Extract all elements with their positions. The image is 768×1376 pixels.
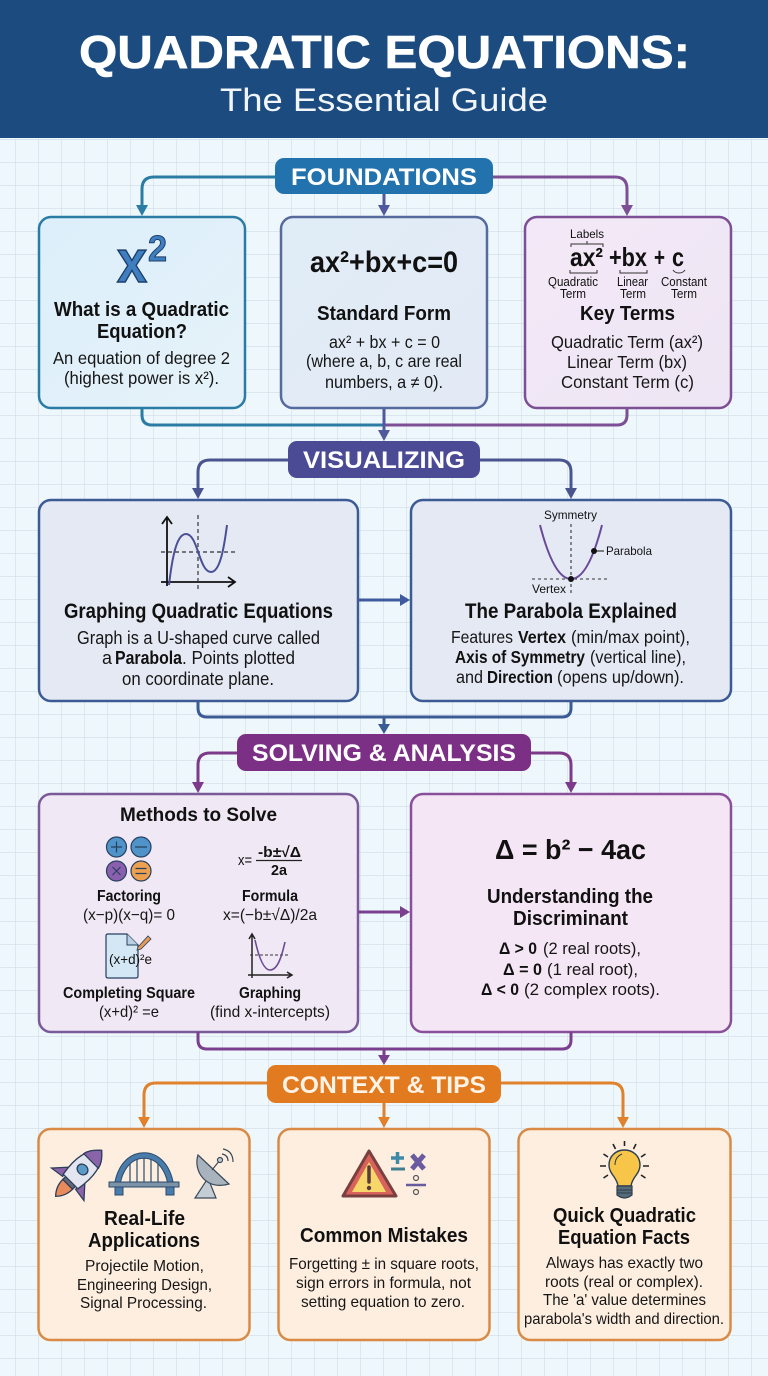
- panel: methods to solve: [39, 794, 358, 1032]
- description: Features: [451, 627, 513, 647]
- description: roots (real or complex).: [545, 1274, 703, 1291]
- icon: quadratic formula: x=: [238, 852, 252, 869]
- panel: common mistakes: [278, 1129, 490, 1340]
- title: QUADRATIC EQUATIONS:: [79, 26, 690, 78]
- description: on coordinate plane.: [122, 669, 274, 689]
- formula: ax²+bx+c=0: [310, 246, 458, 279]
- section badge: solving and analysis: SOLVING & ANALYSIS: [252, 740, 516, 767]
- heading: Methods to Solve: [120, 804, 277, 826]
- description: parabola's width and direction.: [524, 1311, 724, 1328]
- heading: Equation Facts: [558, 1226, 690, 1249]
- icon: small graph: [248, 934, 292, 978]
- labelled formula diagram: c: [672, 242, 684, 272]
- icon: quadratic formula: -b±√Δ: [258, 844, 301, 861]
- description: sign errors in formula, not: [296, 1275, 472, 1292]
- description: Engineering Design,: [77, 1277, 212, 1294]
- heading: [487, 885, 653, 930]
- icon: quadratic formula: [238, 844, 302, 879]
- arrow: methods to discriminant: [358, 906, 410, 918]
- icon: document and pencil: (x+d)²e: [109, 951, 152, 967]
- description: . Points plotted: [182, 648, 295, 668]
- labelled formula diagram: Constant: [661, 275, 707, 289]
- description: ax² + bx + c = 0: [329, 332, 440, 352]
- connectors: visualizing cards to solving: [198, 701, 571, 734]
- labelled formula diagram: [548, 227, 707, 301]
- description: Signal Processing.: [80, 1295, 207, 1312]
- method: graphing: [210, 985, 330, 1021]
- heading: Quick Quadratic: [553, 1204, 696, 1227]
- description: (1 real root),: [547, 960, 638, 979]
- panel: understanding the discriminant: [411, 794, 731, 1032]
- section badge: visualizing: VISUALIZING: [303, 447, 465, 474]
- description: [289, 1256, 479, 1311]
- connectors: solving cards to context: [198, 1032, 571, 1065]
- icon: rocket: [39, 1134, 118, 1213]
- description: Constant Term (c): [561, 372, 694, 392]
- method: graphing: Graphing: [239, 985, 301, 1002]
- heading: Real-Life: [104, 1207, 185, 1230]
- method: completing the square: (x+d)² =e: [99, 1004, 159, 1021]
- heading: Key Terms: [580, 302, 675, 325]
- panel: standard form: [281, 217, 487, 408]
- connectors: foundations to cards: [136, 177, 633, 216]
- diagram: labelled parabola: [532, 508, 652, 596]
- icon: x squared: [117, 228, 167, 295]
- method: factoring: Factoring: [97, 888, 161, 905]
- description: Forgetting ± in square roots,: [289, 1256, 479, 1273]
- labelled formula diagram: ax²: [570, 242, 603, 272]
- diagram: labelled parabola: Parabola: [606, 544, 652, 558]
- description: (highest power is x²).: [64, 368, 219, 388]
- description: [481, 939, 660, 999]
- description: (where a, b, c are real: [306, 351, 462, 371]
- description: The 'a' value determines: [543, 1292, 706, 1309]
- connectors: solving to cards: [192, 753, 577, 793]
- description: [77, 628, 320, 689]
- description: Graph is a U-shaped curve called: [77, 628, 320, 648]
- method: factoring: (x−p)(x−q)= 0: [83, 907, 175, 924]
- labelled formula diagram: Linear: [617, 275, 648, 289]
- description: Δ = 0: [503, 960, 542, 979]
- description: [451, 627, 690, 687]
- heading: [553, 1204, 696, 1249]
- description: [551, 332, 703, 392]
- panel: the parabola explained: [411, 500, 731, 701]
- description: Vertex: [518, 627, 566, 647]
- section badge: foundations: FOUNDATIONS: [291, 164, 477, 191]
- description: (2 complex roots).: [524, 980, 660, 999]
- description: Δ < 0: [481, 980, 519, 999]
- method: completing the square: Completing Square: [63, 985, 195, 1002]
- connectors: visualizing to cards: [192, 460, 577, 499]
- description: (opens up/down).: [557, 667, 684, 687]
- icon: warning triangle: [343, 1151, 396, 1196]
- arrow: graphing to parabola: [358, 594, 410, 606]
- heading: The Parabola Explained: [465, 599, 677, 623]
- formula: Δ = b² − 4ac: [495, 834, 646, 865]
- panel: quick quadratic equation facts: [518, 1129, 730, 1340]
- icon: light bulb: [600, 1141, 649, 1198]
- description: a: [102, 648, 113, 668]
- method: graphing: (find x-intercepts): [210, 1004, 330, 1021]
- icon: x squared: 2: [148, 228, 167, 269]
- subtitle: The Essential Guide: [220, 82, 548, 118]
- labelled formula diagram: Labels: [570, 227, 604, 241]
- section badge: solving and analysis: [237, 734, 531, 771]
- labelled formula diagram: +: [654, 242, 665, 272]
- heading: Common Mistakes: [300, 1224, 468, 1247]
- description: Quadratic Term (ax²): [551, 332, 703, 352]
- icon: bridge: [109, 1154, 179, 1195]
- section badge: context and tips: [267, 1065, 501, 1103]
- header banner: [0, 0, 768, 138]
- heading: Applications: [88, 1229, 200, 1252]
- labelled formula diagram: Term: [671, 287, 697, 301]
- icon: x squared: x: [117, 228, 147, 295]
- section badge: context and tips: CONTEXT & TIPS: [282, 1072, 486, 1099]
- description: setting equation to zero.: [301, 1294, 465, 1311]
- description: Always has exactly two: [546, 1255, 703, 1272]
- heading: [54, 298, 229, 343]
- icon: satellite dish: [195, 1149, 233, 1198]
- section badge: visualizing: [288, 441, 480, 478]
- icon: document and pencil: [106, 934, 152, 978]
- labelled formula diagram: Term: [560, 287, 586, 301]
- icon: graph: [161, 515, 235, 590]
- labelled formula diagram: Quadratic: [548, 275, 598, 289]
- description: (min/max point),: [571, 627, 690, 647]
- icon: operator circles: [106, 837, 151, 881]
- description: [524, 1255, 724, 1328]
- diagram: labelled parabola: Symmetry: [544, 508, 597, 522]
- labelled formula diagram: Term: [620, 287, 646, 301]
- icon: math operators: [391, 1152, 426, 1194]
- heading: Discriminant: [513, 907, 628, 930]
- description: Linear Term (bx): [567, 352, 687, 372]
- description: Δ > 0: [499, 939, 537, 958]
- description: Projectile Motion,: [85, 1258, 204, 1275]
- panel: what is a quadratic equation: [39, 217, 245, 408]
- description: and: [456, 667, 483, 687]
- method: formula: x=(−b±√Δ)/2a: [223, 907, 317, 924]
- labelled formula diagram: +bx: [609, 242, 647, 272]
- panel: key terms: [525, 217, 731, 408]
- panel: real-life applications: [38, 1129, 250, 1340]
- section badge: foundations: [275, 158, 493, 194]
- description: Direction: [487, 667, 553, 687]
- description: (2 real roots),: [543, 939, 641, 958]
- connectors: context to cards: [138, 1083, 629, 1128]
- heading: [88, 1207, 200, 1252]
- heading: Standard Form: [317, 302, 451, 325]
- description: [306, 332, 462, 392]
- description: An equation of degree 2: [53, 348, 230, 368]
- description: numbers, a ≠ 0).: [325, 372, 443, 392]
- heading: Graphing Quadratic Equations: [64, 599, 333, 623]
- connectors: cards to visualizing: [142, 408, 627, 441]
- panel: graphing quadratic equations: [39, 500, 358, 701]
- method: factoring: [83, 888, 175, 924]
- description: [53, 348, 230, 388]
- diagram: labelled parabola: Vertex: [532, 582, 566, 596]
- icon: quadratic formula: 2a: [271, 862, 288, 879]
- description: Parabola: [115, 648, 183, 668]
- description: Axis of Symmetry: [455, 647, 585, 667]
- method: completing the square: [63, 985, 195, 1021]
- heading: What is a Quadratic: [54, 298, 229, 321]
- heading: Understanding the: [487, 885, 653, 908]
- heading: Equation?: [97, 320, 187, 343]
- method: formula: [223, 888, 317, 924]
- method: formula: Formula: [242, 888, 298, 905]
- description: (vertical line),: [590, 647, 686, 667]
- description: [77, 1258, 212, 1312]
